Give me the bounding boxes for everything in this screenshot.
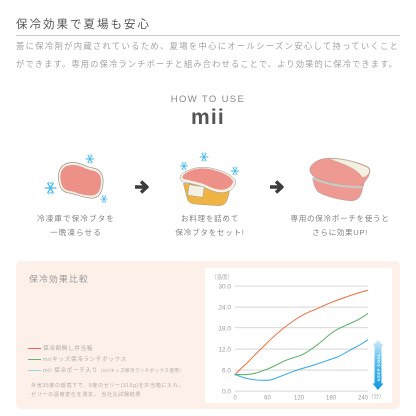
title rule	[16, 35, 400, 36]
legend: with pouch: mii 保冷ポーチ入り（miiキッズ保冷ランチボックス使用）	[43, 368, 184, 374]
keep cool arrow	[372, 340, 384, 390]
intro text: 蓋に保冷剤が内蔵されているため、夏場を中心にオールシーズン安心して持っていくこと	[16, 41, 399, 51]
y axis unit: （温度）	[211, 273, 233, 281]
x axis labels: 240	[358, 396, 369, 402]
y axis labels: 24.0	[218, 304, 231, 312]
x axis labels: 0	[233, 396, 237, 402]
legend: no ice pack: 保冷剤無し弁当箱	[43, 346, 93, 352]
how to use heading	[171, 94, 245, 128]
step 1 caption: 冷凍庫で保冷ブタを	[37, 214, 115, 223]
y axis labels: 18.0	[218, 326, 231, 332]
blue line	[235, 340, 368, 380]
x axis labels: 120	[294, 396, 305, 402]
icon: snowflakes step 1	[45, 155, 107, 203]
x axis unit: （分）	[368, 392, 385, 400]
line chart	[211, 273, 385, 402]
icon: snowflakes step 2	[180, 153, 239, 175]
test note: ゼリーの温度変化を測定。 当社比試験結果	[31, 392, 141, 398]
y axis labels: 0.0	[222, 388, 231, 396]
title: 保冷効果で夏場も安心	[16, 19, 151, 31]
step 1 caption: 一晩凍らせる	[50, 228, 102, 236]
icon: cooler pouch	[310, 158, 370, 201]
y axis labels: 12.0	[218, 346, 231, 354]
legend: kids lunch box: miiキッズ保冷ランチボックス	[43, 357, 127, 363]
step 1 caption	[37, 214, 115, 236]
legend	[28, 345, 184, 374]
x axis labels: 180	[326, 396, 337, 402]
x axis labels: 60	[264, 396, 271, 402]
green line	[235, 314, 368, 375]
intro text	[16, 41, 399, 69]
test note: 外気35度の環境下で、5度のゼリー(315g)を弁当箱に入れ、	[31, 383, 184, 389]
comparison panel background	[16, 261, 400, 409]
arrow 2	[270, 182, 282, 192]
how to use heading: HOW TO USE	[171, 94, 245, 105]
y axis labels	[218, 284, 231, 396]
arrow 1	[135, 182, 147, 192]
step 3 caption	[290, 214, 389, 236]
grid lines	[235, 286, 368, 392]
icon: lunch box with lid	[180, 167, 236, 206]
chart card	[205, 268, 392, 403]
step 2 caption	[175, 214, 245, 236]
orange line	[235, 290, 368, 375]
how to use heading: mii	[191, 106, 225, 128]
step 2 caption: 保冷ブタをセット!	[175, 228, 245, 236]
step 2 caption: お料理を詰めて	[181, 214, 239, 223]
y axis labels: 30.0	[218, 284, 231, 290]
intro text: ができます。専用の保冷ランチポーチと組み合わせることで、より効果的に保冷できます。	[16, 59, 398, 69]
step 3 caption: 専用の保冷ポーチを使うと	[291, 214, 389, 223]
y axis labels: 6.0	[222, 368, 231, 374]
test note	[31, 382, 184, 398]
step 3 caption: さらに効果UP!	[312, 228, 368, 236]
x axis labels	[233, 396, 369, 402]
panel heading: 保冷効果比較	[29, 274, 89, 284]
icon: frozen lid	[58, 162, 103, 198]
keep cool arrow: KEEP COOL	[376, 353, 381, 381]
